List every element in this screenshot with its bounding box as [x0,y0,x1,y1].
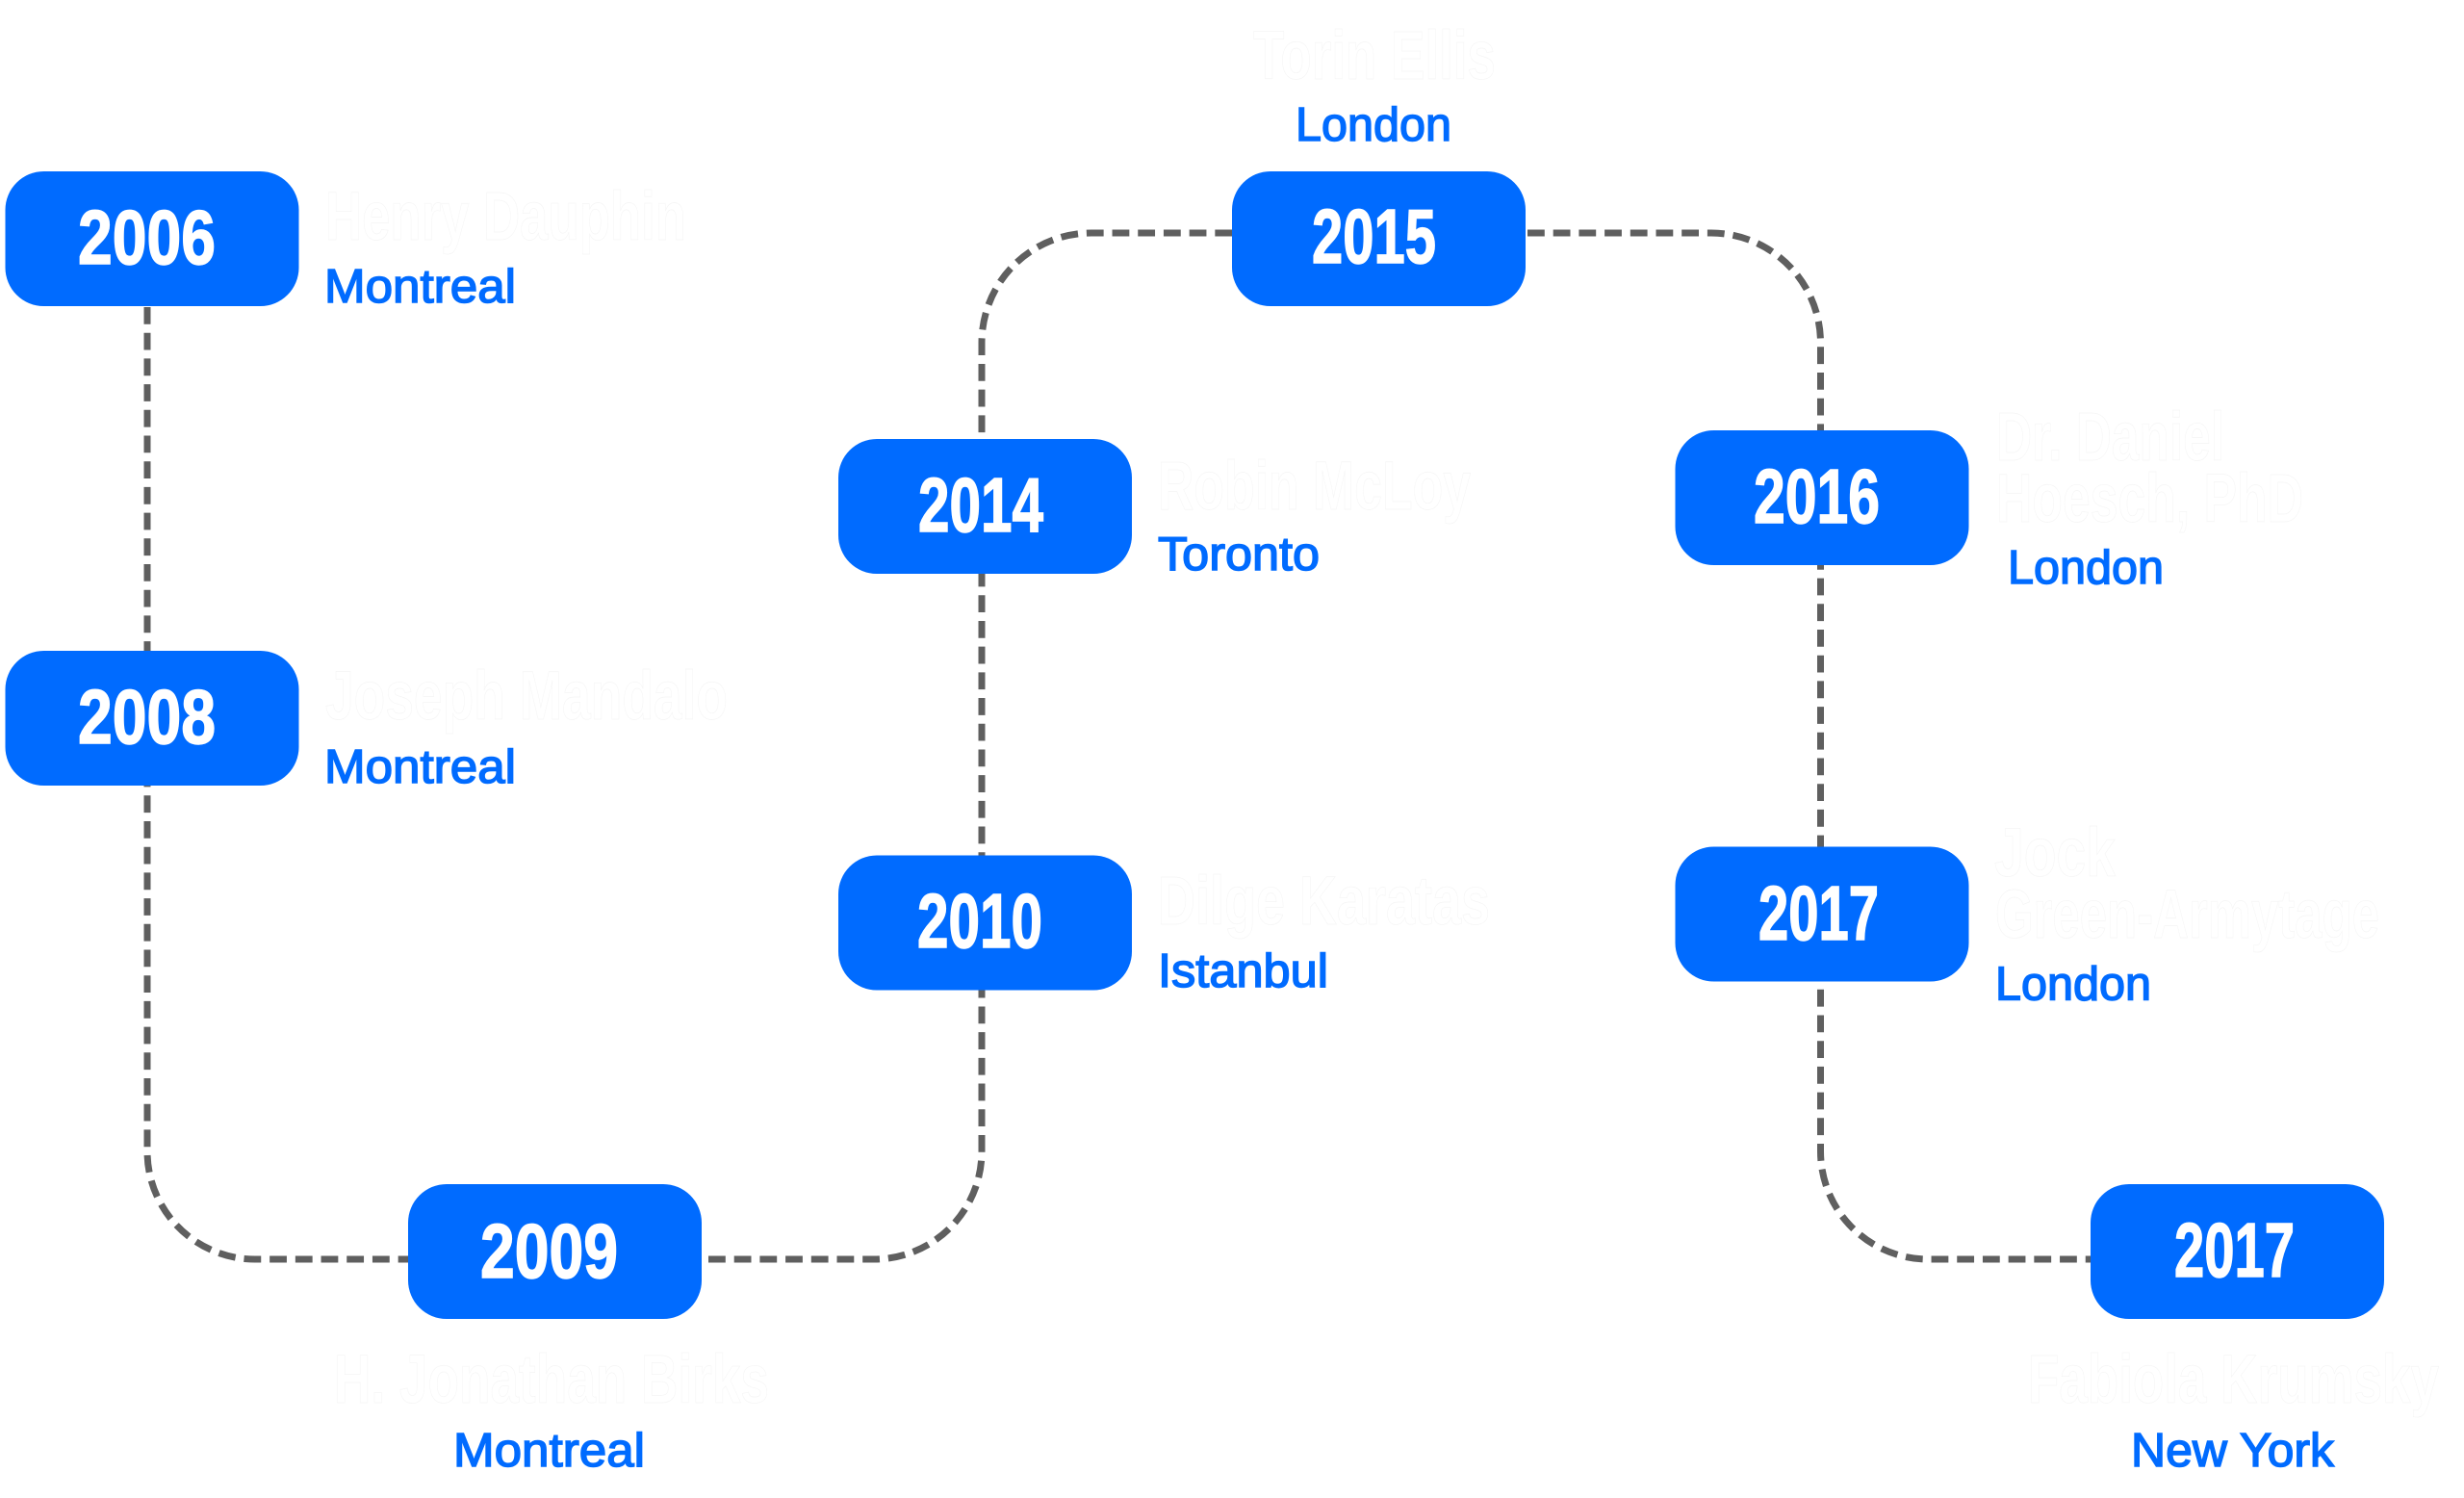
name [1996,400,2303,537]
city: Montreal [324,741,516,793]
year badge 2006: 2006 [78,194,216,280]
name [1994,815,2379,953]
year badge 2010: 2010 [917,878,1042,964]
year badge 2008 [6,651,298,786]
year badge 2009 [408,1184,702,1319]
year badge 2006 [6,171,298,306]
connector: 2006 to 2009 [147,307,408,1259]
year badge 2016 [1675,430,1969,565]
city: Montreal [324,261,516,313]
name: Henry Dauphin [325,179,686,255]
milestone: 2010 Dilge Karatas [838,855,1490,997]
year badge 2017: 2017 [2174,1207,2295,1293]
name: Dr. Daniel [1996,400,2224,476]
name: Torin Ellis [1253,18,1496,94]
year badge 2017 [1675,847,1969,982]
city: Montreal [453,1425,645,1477]
year badge 2017 [2091,1184,2384,1319]
year badge 2017: 2017 [1758,870,1879,956]
name: H. Jonathan Birks [334,1342,769,1418]
milestone: 2017 Fabiola Krumsky [2028,1184,2439,1477]
milestone: 2016 Dr. Daniel Hoesch, PhD [1675,400,2303,594]
city: Istanbul [1158,945,1328,997]
city: New York [2131,1425,2334,1477]
year badge 2010 [838,855,1132,990]
year badge 2014: 2014 [918,462,1043,548]
milestone: 2008 Joseph Mandalo [6,651,728,793]
year badge 2014 [838,439,1132,574]
year badge 2015 [1232,171,1526,306]
milestone: 2017 Jock Green-Armytage [1675,815,2379,1011]
year badge 2016: 2016 [1754,453,1880,539]
milestone: 2014 Robin McLoy [838,439,1471,581]
milestone: 2015 Torin Ellis [1232,18,1526,306]
milestone: 2009 H. Jonathan Birks [334,1184,769,1477]
name: Hoesch, PhD [1996,461,2303,537]
city: London [1296,99,1451,151]
connector: 2015 to 2017 [1527,233,2091,1259]
city: Toronto [1158,529,1320,581]
name: Dilge Karatas [1158,864,1490,940]
name: Joseph Mandalo [325,659,728,735]
year badge 2015: 2015 [1312,194,1436,279]
milestone: 2006 Henry Dauphin [6,171,686,313]
city: London [1995,959,2151,1011]
name: Robin McLoy [1158,449,1471,525]
city: London [2008,542,2164,594]
year badge 2009: 2009 [480,1208,618,1294]
connector: 2009 to 2015 [708,233,1232,1259]
name: Jock [1994,815,2116,891]
year badge 2008: 2008 [78,674,216,760]
